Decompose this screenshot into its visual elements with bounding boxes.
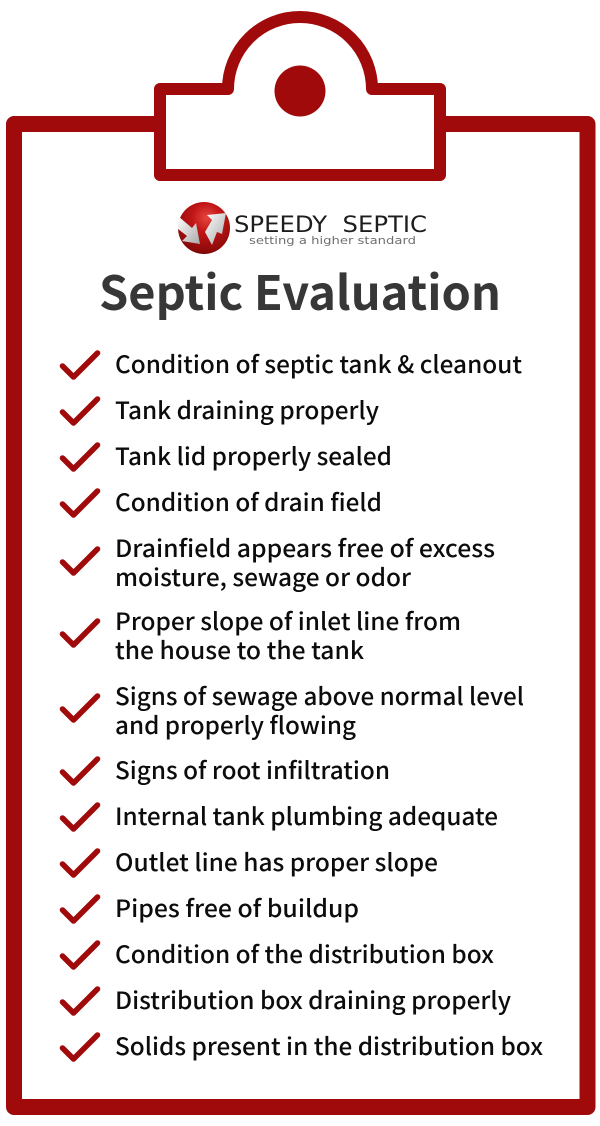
logo icon: red sphere with arrows — [178, 202, 230, 254]
item 10: Outlet line has proper slope — [115, 843, 438, 878]
clip hole — [274, 66, 326, 116]
item 7: Signs of sewage above normal level — [115, 677, 524, 712]
logo: Speedy Septic — [178, 202, 427, 254]
item 1: Condition of septic tank & cleanout — [115, 345, 522, 380]
item 5: Drainfield appears free of excess — [115, 529, 495, 564]
item 8: Signs of root infiltration — [115, 751, 390, 786]
logo wordmark: SPEEDY SEPTIC — [234, 213, 427, 238]
item 11: Pipes free of buildup — [115, 889, 359, 924]
title: Septic Evaluation — [99, 255, 501, 324]
item 4: Condition of drain field — [115, 483, 382, 518]
clipboard clip — [160, 17, 440, 175]
logo tagline: setting a higher standard — [249, 235, 416, 247]
item 7 — [62, 677, 524, 741]
item 2: Tank draining properly — [115, 391, 379, 426]
item 5 — [62, 529, 495, 593]
item 6 — [62, 602, 461, 666]
checklist — [62, 345, 543, 1062]
item 6: the house to the tank — [115, 631, 364, 666]
item 6: Proper slope of inlet line from — [115, 602, 461, 637]
item 3: Tank lid properly sealed — [115, 437, 392, 472]
item 13: Distribution box draining properly — [115, 981, 511, 1016]
item 7: and properly flowing — [115, 706, 356, 741]
item 9: Internal tank plumbing adequate — [115, 797, 498, 832]
item 12: Condition of the distribution box — [115, 935, 494, 970]
item 14: Solids present in the distribution box — [115, 1027, 543, 1062]
item 5: moisture, sewage or odor — [115, 558, 411, 593]
